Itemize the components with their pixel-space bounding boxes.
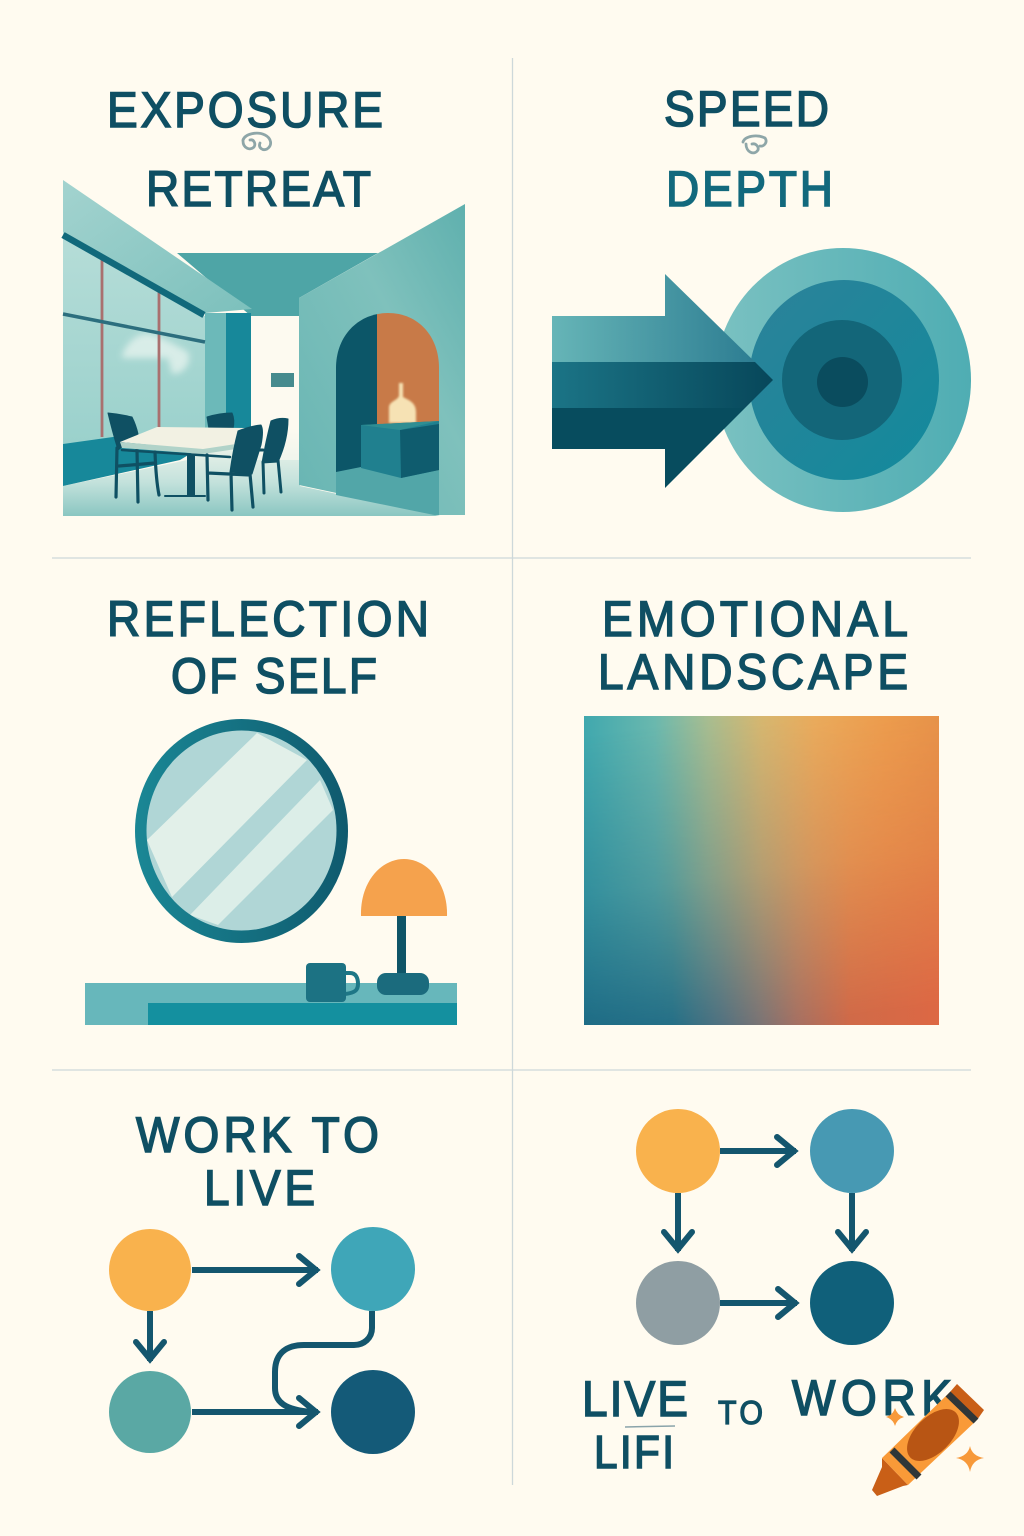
node: teal: [331, 1227, 415, 1311]
node: orange: [636, 1109, 720, 1193]
doorway: [251, 316, 300, 466]
column: [205, 313, 226, 438]
flow diagram: [636, 1109, 894, 1345]
right chair: [262, 418, 288, 463]
node: navy: [810, 1261, 894, 1345]
label: lifi: LIFI: [594, 1427, 674, 1478]
left chair: [108, 413, 138, 450]
label: to: TO: [718, 1394, 763, 1431]
node: grey: [636, 1261, 720, 1345]
arrow: bottom: [192, 1409, 318, 1415]
heading: landscape: LANDSCAPE: [598, 645, 908, 700]
floor: [63, 438, 440, 516]
node: orange: [109, 1229, 191, 1311]
gradient square: [584, 716, 939, 1025]
lit bottle: [389, 383, 416, 423]
label: work: WORK: [792, 1371, 952, 1426]
illustration: shelf: [85, 983, 457, 1025]
panel: exposure and retreat: [63, 83, 465, 516]
illustration: concentric target: [715, 248, 971, 512]
low wall: [63, 432, 205, 486]
upper left wall: [63, 180, 252, 313]
heading: speed: SPEED: [664, 82, 829, 137]
node: navy: [331, 1370, 415, 1454]
arrow: top: [192, 1267, 318, 1273]
arrow: top: [720, 1148, 796, 1154]
arrow: left: [147, 1311, 153, 1361]
window glow: [122, 334, 189, 374]
arrow: bottom: [720, 1300, 797, 1306]
panel: emotional landscape: [584, 592, 939, 1025]
heading: emotional: EMOTIONAL: [602, 592, 908, 647]
illustration: mirror: [135, 719, 348, 943]
dining table and chairs: [108, 413, 288, 510]
window frames: [63, 254, 205, 437]
illustration: room interior: [63, 180, 465, 516]
heading: retreat: RETREAT: [146, 162, 371, 217]
panel: live to work: [582, 1109, 952, 1478]
front chair: [230, 425, 262, 474]
heading: live: LIVE: [204, 1161, 315, 1216]
heading: of self: OF SELF: [171, 649, 377, 704]
flow diagram: [109, 1227, 415, 1454]
panel: speed and depth: [552, 82, 971, 512]
sign: [271, 373, 294, 387]
crayon bands: [892, 1394, 976, 1477]
heading: depth: DEPTH: [666, 162, 833, 217]
table: [120, 427, 247, 450]
heading: exposure: EXPOSURE: [107, 83, 383, 138]
icon: lamp: [361, 859, 447, 995]
icon: smudge: [243, 133, 271, 150]
label: live: LIVE: [582, 1372, 688, 1427]
niche: [336, 310, 439, 516]
icon: smudge: [743, 136, 766, 153]
illustration: arrow: [552, 274, 773, 488]
icon: mug: [306, 963, 358, 1002]
panel: reflection of self: [85, 592, 457, 1025]
arrow: left: [675, 1193, 681, 1251]
heading: work to: WORK TO: [136, 1108, 379, 1163]
panel: work to live: [109, 1108, 415, 1454]
arrow: right: [849, 1193, 855, 1251]
arrow: curved: [275, 1311, 372, 1412]
back chair: [207, 413, 234, 429]
ceiling: [177, 253, 378, 316]
heading: reflection: REFLECTION: [107, 592, 429, 647]
right wall: [299, 204, 465, 515]
node: green: [109, 1371, 191, 1453]
icon: crayon with sparkles: [872, 1384, 984, 1496]
node: blue: [810, 1109, 894, 1193]
crayon oval: [898, 1400, 968, 1470]
